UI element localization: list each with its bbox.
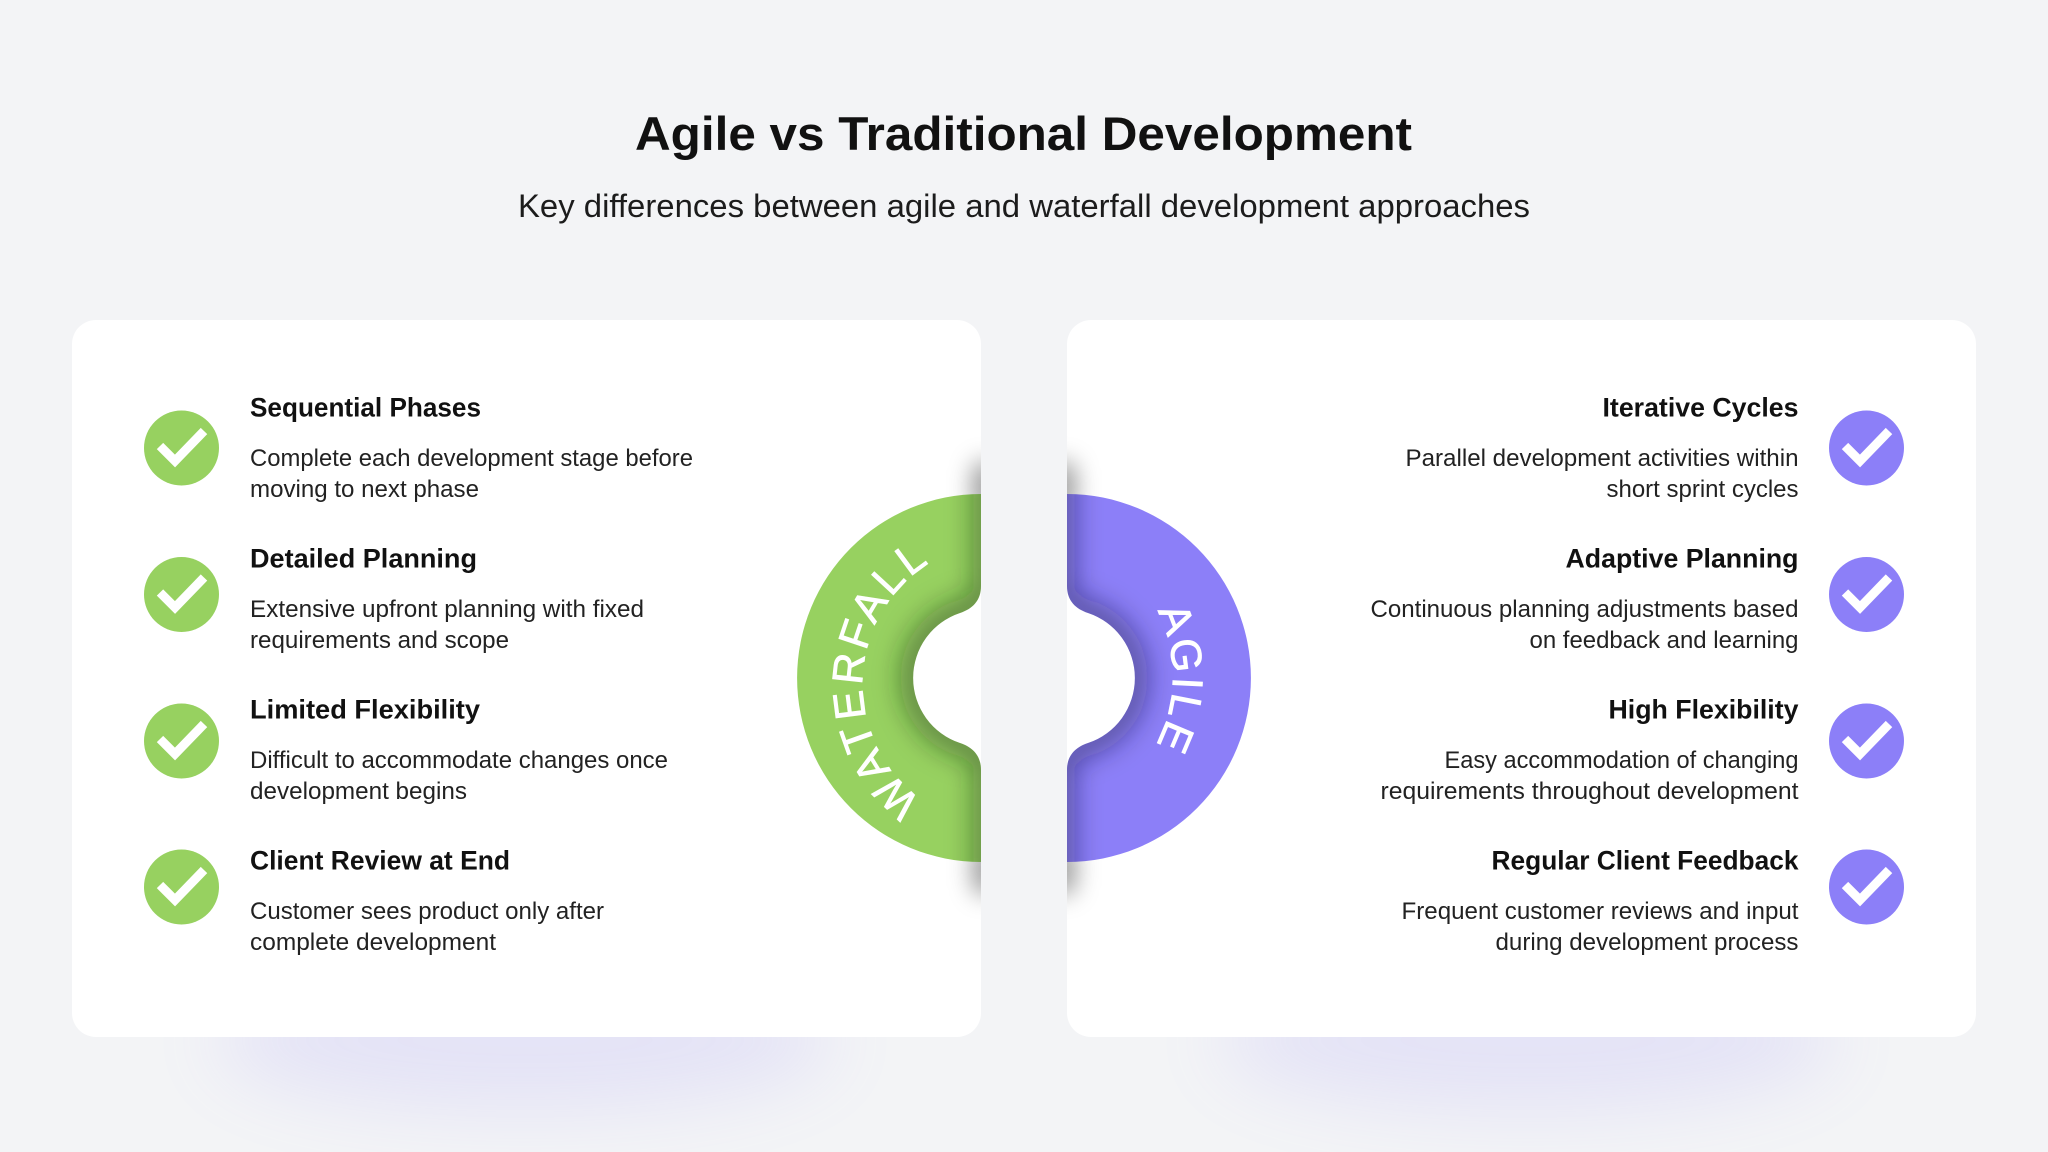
item: iterative cycles: short sprint cycles [1606, 476, 1798, 503]
item: adaptive planning: Adaptive Planning [1566, 544, 1798, 574]
item: client review at end: Customer sees product only after [250, 898, 604, 925]
shadow above and below agile ring [1049, 474, 1075, 882]
item: iterative cycles: Iterative Cycles [1602, 392, 1798, 422]
item: client review at end: complete development [250, 929, 496, 956]
item: limited flexibility: Difficult to accommodate changes once [250, 747, 668, 774]
glow under right panel [1218, 968, 1838, 1112]
panel background [1067, 320, 1976, 1037]
item: sequential phases: Complete each development stage before [250, 445, 693, 472]
title: Agile vs Traditional Development [635, 107, 1412, 160]
item: regular client feedback [1402, 846, 1904, 956]
icon: check [1829, 704, 1904, 778]
subtitle: Key differences between agile and waterfall development approaches [518, 188, 1530, 224]
item: detailed planning: requirements and scope [250, 627, 509, 654]
waterfall ring [797, 494, 981, 862]
item: sequential phases: Sequential Phases [250, 392, 481, 422]
icon: check [144, 850, 219, 924]
item: adaptive planning: Continuous planning adjustments based [1370, 596, 1798, 623]
item: high flexibility: requirements throughout development [1380, 778, 1799, 805]
item: regular client feedback: during development process [1496, 929, 1798, 956]
item: regular client feedback: Frequent customer reviews and input [1402, 898, 1799, 925]
panel: waterfall [72, 320, 981, 1037]
item: detailed planning: Extensive upfront planning with fixed [250, 596, 644, 623]
item: limited flexibility [144, 694, 668, 805]
item: iterative cycles: Parallel development activities within [1406, 445, 1798, 472]
item: high flexibility: High Flexibility [1608, 694, 1798, 724]
item: detailed planning: Detailed Planning [250, 544, 477, 574]
ring label: waterfall: WATERFALL [832, 548, 928, 823]
item: high flexibility [1380, 694, 1904, 805]
ring label: agile: AGILE [1156, 610, 1203, 754]
panel: agile [1067, 320, 1976, 1037]
panel background [72, 320, 981, 1037]
item: limited flexibility: development begins [250, 778, 467, 805]
item: adaptive planning: on feedback and learning [1530, 627, 1798, 654]
item: limited flexibility: Limited Flexibility [250, 694, 480, 724]
shadow above and below waterfall ring [973, 474, 999, 882]
item: sequential phases [144, 392, 693, 503]
icon: check [144, 557, 219, 632]
icon: check [1829, 850, 1904, 924]
icon: check [1829, 557, 1904, 632]
item: client review at end [144, 846, 604, 956]
item: regular client feedback: Regular Client Feedback [1492, 846, 1799, 876]
icon: check [1829, 410, 1904, 486]
glow under left panel [215, 968, 835, 1112]
item: high flexibility: Easy accommodation of changing [1444, 747, 1798, 774]
icon: check [144, 410, 219, 486]
item: iterative cycles [1406, 392, 1904, 503]
item: adaptive planning [1370, 544, 1904, 654]
item: sequential phases: moving to next phase [250, 476, 479, 503]
item: detailed planning [144, 544, 644, 654]
item: client review at end: Client Review at End [250, 846, 510, 876]
icon: check [144, 704, 219, 778]
agile ring [1067, 494, 1251, 862]
